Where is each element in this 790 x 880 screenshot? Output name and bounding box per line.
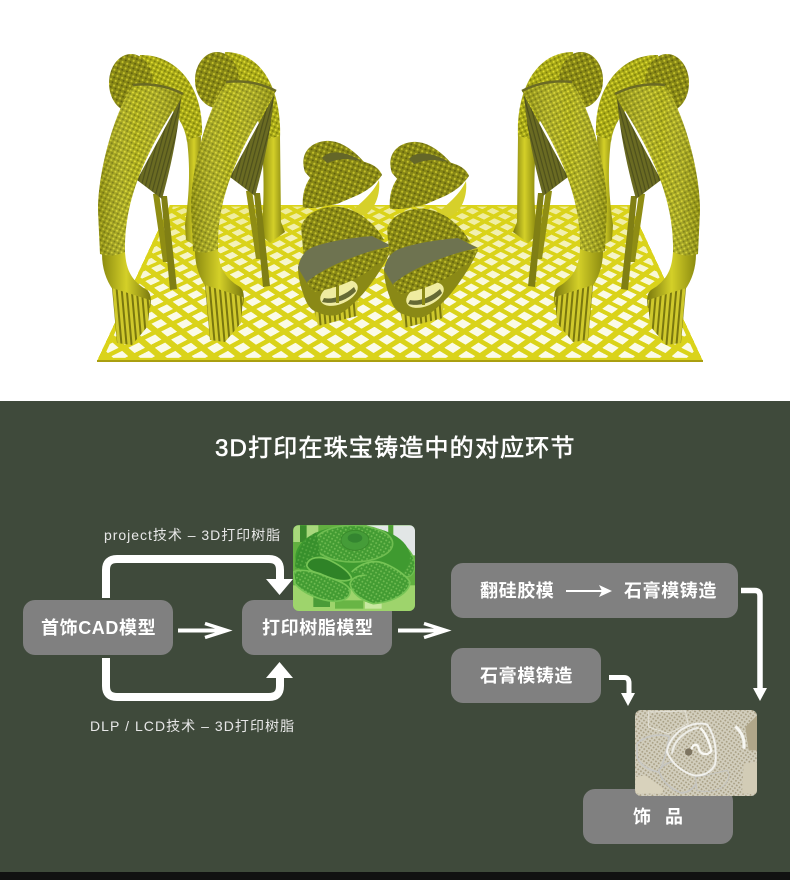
dark process panel <box>0 401 790 872</box>
right petal <box>350 562 410 604</box>
label: project technology: project技术 – 3D打印树脂 <box>104 527 281 543</box>
title: 3D打印在珠宝铸造中的对应环节 <box>215 435 576 462</box>
box: jewellery <box>583 789 733 844</box>
footer band <box>0 872 790 880</box>
central petal <box>667 723 716 775</box>
right pair of printed arches <box>513 52 700 345</box>
box: plaster casting <box>451 648 601 703</box>
side petal <box>402 547 415 578</box>
arrow: CAD to resin model <box>178 624 227 638</box>
arrow: short elbow to jewellery <box>609 678 635 706</box>
image: finished metal flower <box>635 710 757 796</box>
corner light petals <box>635 775 664 794</box>
photo plate: yellow printed lattice base <box>97 205 703 361</box>
box: jewellery: 饰 <box>633 807 651 827</box>
box: jewellery: 品 <box>665 807 683 827</box>
left outer band <box>295 532 320 569</box>
box: resin print model <box>242 600 392 655</box>
inner swirl <box>691 728 711 754</box>
base body <box>295 525 410 589</box>
arrow: resin model to casting options <box>398 624 446 638</box>
bottom-centre petal <box>659 761 699 793</box>
box: silicone mould then plaster casting: 石膏模铸造 <box>624 580 717 601</box>
image: green resin flower <box>293 525 415 611</box>
box: CAD model: 首饰CAD模型 <box>41 618 156 638</box>
box: silicone mould then plaster casting <box>451 563 738 618</box>
left pair of printed arches <box>98 52 285 345</box>
label: DLP / LCD technology: DLP / LCD技术 – 3D打印树脂 <box>90 718 295 734</box>
front rings <box>298 207 478 328</box>
bottom-right petal <box>695 770 729 791</box>
box: CAD model <box>23 600 173 655</box>
box: resin print model: 打印树脂模型 <box>262 618 374 638</box>
box: plaster casting: 石膏模铸造 <box>480 665 573 686</box>
arrow: lower route from CAD to resin model <box>106 658 293 697</box>
plate front rim <box>97 360 703 362</box>
arrow: long elbow to jewellery <box>741 590 767 701</box>
lower-left petal <box>293 570 350 601</box>
top petal ring <box>314 525 393 562</box>
box: silicone mould then plaster casting: 翻硅胶模 <box>480 580 554 601</box>
centre dark petal <box>307 558 352 581</box>
left petal <box>637 735 669 772</box>
arrow: upper route from CAD to resin model <box>106 559 293 598</box>
back rings <box>303 141 469 217</box>
top-left petal <box>649 711 688 734</box>
top-right petal <box>712 711 744 764</box>
